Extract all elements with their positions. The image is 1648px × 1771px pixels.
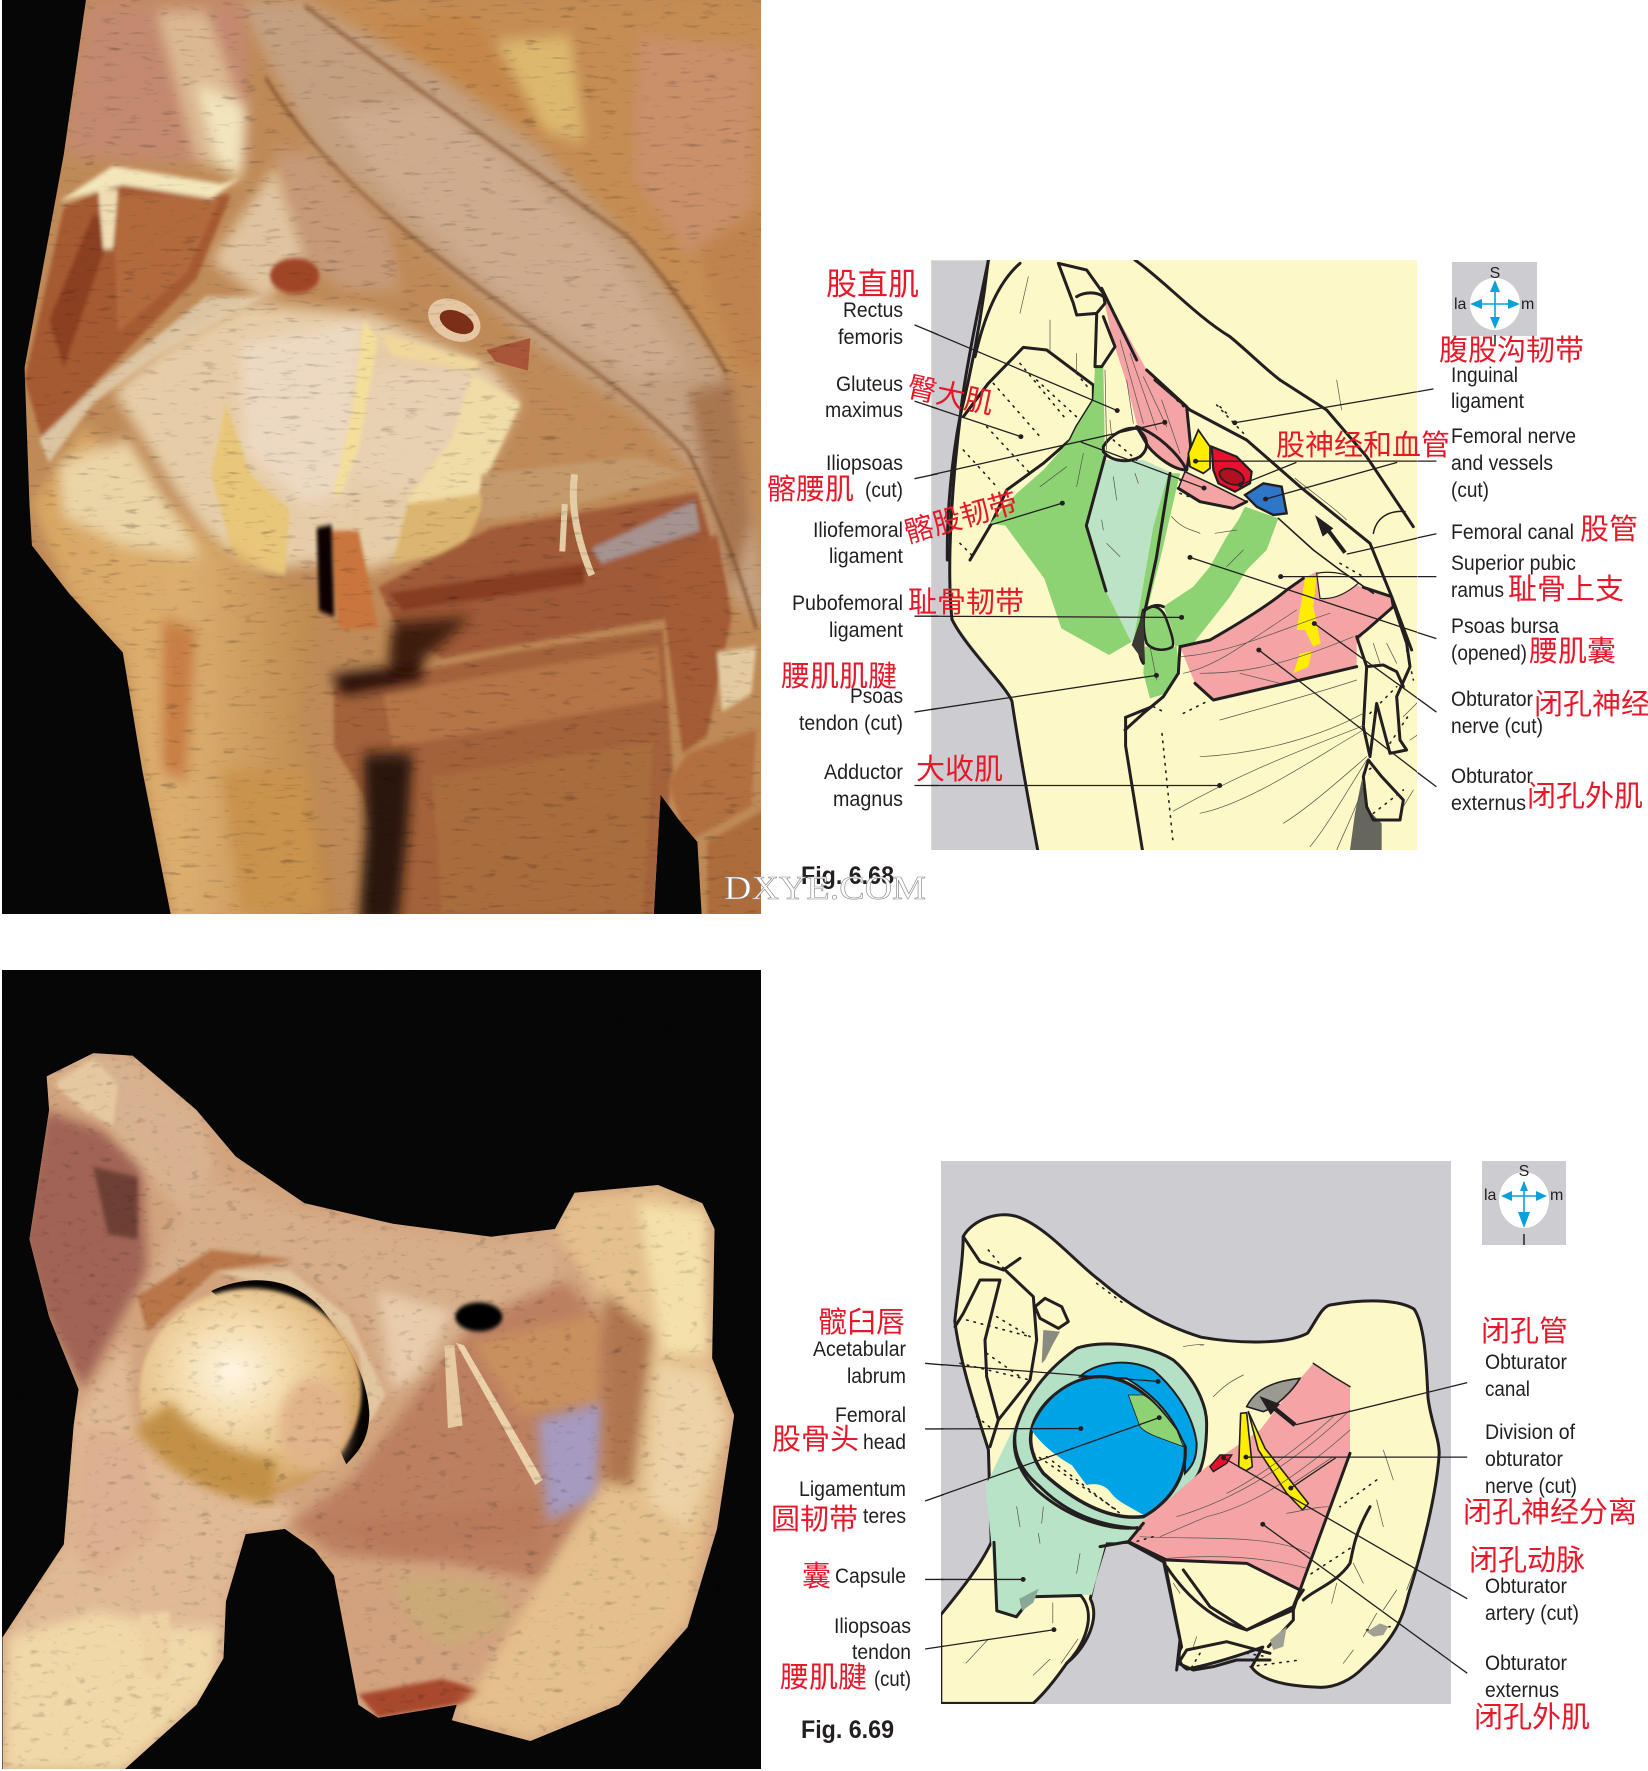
labels right, Fig. 6.68: Obturator (1451, 687, 1533, 711)
tissue: dark shadows between muscles (329, 617, 471, 925)
striations (1150, 380, 1353, 683)
tissue: nerve strand (562, 474, 592, 575)
stipple around socket (1033, 1453, 1153, 1543)
muscle: iliopsoas pink (1102, 288, 1190, 470)
tissue: dark cleft beside tendon (317, 525, 334, 617)
tissue: dark iliac recess (93, 1167, 138, 1239)
labels right, Fig. 6.68: (cut) (1451, 478, 1489, 502)
orientation compass, Fig. 6.68 (1452, 262, 1537, 350)
capsule: pale green lower (986, 1422, 1162, 1617)
red Chinese labels, Fig. 6.69: 股骨头 (772, 1424, 859, 1456)
tissue: joint capsule (113, 302, 521, 575)
labels right, Fig. 6.69: Obturator (1485, 1350, 1567, 1374)
outlines: lower contours (1125, 380, 1413, 730)
tissue: femoral artery cut end (428, 298, 530, 370)
labels left, Fig. 6.69: Capsule (835, 1564, 906, 1588)
tissue: abdominal fascia upper right (380, 12, 760, 369)
figure caption: Fig. 6.69: Fig. 6.69 (801, 1716, 894, 1744)
ilium contours traced at 3x (955, 1237, 1123, 1447)
artery lumen (1217, 465, 1246, 488)
lower right bones traced at 3x (1173, 1450, 1417, 1670)
labels left, Fig. 6.68: Adductor (824, 760, 903, 784)
tissue: head articular rim (152, 1379, 349, 1482)
labels right, Fig. 6.68: Psoas bursa (1451, 614, 1559, 638)
labels left, Fig. 6.69: tendon (852, 1640, 911, 1664)
leader line stubs outside the diagram, Fig. 6.68 (914, 325, 1436, 787)
bursa: small pink (1178, 472, 1247, 508)
tissue: psoas tendon block (140, 1611, 170, 1626)
tissue: red stump on the capsule (270, 258, 319, 294)
labels left, Fig. 6.69: head (863, 1430, 906, 1454)
tissue: adductor muscle (334, 629, 673, 925)
labels right, Fig. 6.69: Division of (1485, 1420, 1575, 1444)
leader line stubs outside the diagram, Fig. 6.69 (925, 1363, 1467, 1673)
pink contours (1015, 1433, 1350, 1670)
labels left, Fig. 6.68: Iliofemoral (813, 518, 903, 542)
stipple (1363, 650, 1413, 813)
labels right, Fig. 6.68: Femoral canal (1451, 520, 1574, 544)
orientation compass, Fig. 6.69 (1482, 1161, 1566, 1249)
labels right, Fig. 6.68: Obturator (1451, 764, 1533, 788)
ligament: iliofemoral green (990, 367, 1131, 655)
red Chinese labels, Fig. 6.69: 闭孔外肌 (1474, 1701, 1590, 1734)
tissue: nerve strands (444, 1343, 543, 1485)
artery: femoral red (1212, 447, 1252, 492)
tissue: obturator externus muscle (290, 1281, 614, 1581)
tissue: pelvis and femur base colour (2, 1053, 734, 1769)
labels left, Fig. 6.68: femoris (838, 325, 903, 349)
leader lines (914, 325, 1436, 787)
labels right, Fig. 6.68: Superior pubic (1451, 551, 1576, 575)
labels right, Fig. 6.69: canal (1485, 1377, 1530, 1401)
red Chinese labels, Fig. 6.68: 大收肌 (916, 753, 1003, 786)
labels left, Fig. 6.69: labrum (847, 1364, 906, 1388)
tissue: gluteal red muscle (25, 166, 265, 463)
labels left, Fig. 6.69: Acetabular (813, 1337, 906, 1361)
labels left, Fig. 6.68: Pubofemoral (792, 591, 903, 615)
orientation compass, Fig. 6.69: m (1550, 1187, 1563, 1204)
labels left, Fig. 6.68: Psoas (850, 684, 903, 708)
tissue: yellow bands on capsule (211, 320, 521, 575)
red Chinese labels, Fig. 6.69: 闭孔管 (1481, 1315, 1568, 1348)
labels left, Fig. 6.68: Rectus (843, 298, 903, 322)
red Chinese labels, Fig. 6.68 (767, 267, 1648, 813)
labels left, Fig. 6.68: Iliopsoas (826, 451, 903, 475)
labels left, Fig. 6.69: (cut) (874, 1667, 911, 1691)
photo: dissection of the anterior hip, Fig. 6.68 (0, 0, 780, 930)
nerve: division of obturator nerve yellow (1239, 1412, 1308, 1510)
red Chinese labels, Fig. 6.69: 髋臼唇 (818, 1306, 905, 1339)
central vessels traced at 3x (1125, 380, 1413, 730)
femoral head blue (1032, 1378, 1184, 1515)
labels right, Fig. 6.68 (1451, 363, 1576, 815)
tissue: femoral neck and capsule (2, 1338, 295, 1771)
orientation compass, Fig. 6.68: S (1490, 265, 1500, 282)
arrow: obturator canal (1259, 1396, 1295, 1425)
dark stipple below the notch (1042, 1330, 1060, 1363)
labels left, Fig. 6.68: ligament (829, 544, 903, 568)
tissue: black crescent around femoral head (211, 1280, 369, 1464)
labels left, Fig. 6.68: (cut) (865, 478, 903, 502)
red Chinese labels, Fig. 6.68: 股直肌 (826, 267, 919, 302)
lower right bones traced at 3x (1200, 603, 1420, 850)
red Chinese labels, Fig. 6.68: 腰肌囊 (1529, 635, 1616, 668)
stipple (1190, 1480, 1390, 1670)
tissue: fascia crease lines (265, 6, 756, 629)
labels left, Fig. 6.69: teres (863, 1504, 906, 1528)
labels right, Fig. 6.68: and vessels (1451, 451, 1553, 475)
red Chinese labels, Fig. 6.68: 髂腰肌 (767, 473, 854, 506)
labels right, Fig. 6.69 (1485, 1350, 1579, 1702)
stipple (1162, 734, 1173, 844)
red Chinese labels, Fig. 6.69: 圆韧带 (771, 1504, 858, 1536)
ligament: pale central band (1086, 460, 1173, 642)
watermark: DXYE.COM: DXYE.COM (724, 870, 926, 907)
bone: pelvis and femur cream shape (941, 1215, 1439, 1703)
red Chinese labels, Fig. 6.68: 腰肌肌腱 (781, 660, 897, 693)
leader dots (1018, 408, 1317, 788)
labels right, Fig. 6.69: Obturator (1485, 1651, 1567, 1675)
femur and lower thigh contours (914, 260, 1436, 850)
tissue: spine highlight (54, 1058, 118, 1126)
tissue: upper thigh muscle (64, 0, 250, 181)
labels left, Fig. 6.68: maximus (825, 398, 903, 422)
orientation compass, Fig. 6.69: la (1484, 1187, 1497, 1204)
labels right, Fig. 6.69: Obturator (1485, 1574, 1567, 1598)
tissue: reddish rim above the socket (138, 1250, 295, 1332)
upper diagram colours traced at 3x (947, 260, 1280, 655)
labels left, Fig. 6.69: Ligamentum (799, 1477, 906, 1501)
arrow: femoral canal (1315, 515, 1345, 553)
leader lines (925, 1363, 1467, 1673)
nerve: obturator nerve yellow (1293, 577, 1321, 673)
labels right, Fig. 6.69: externus (1485, 1678, 1559, 1702)
ligament: green strip (1133, 473, 1180, 643)
orientation compass, Fig. 6.69: I (1522, 1232, 1526, 1249)
thin curved bone line at the top right (1373, 511, 1405, 533)
labels left, Fig. 6.69 (799, 1337, 911, 1691)
fine lines (966, 1603, 1078, 1675)
tissue: pubic region right (457, 1188, 732, 1738)
tissue: iliopsoas fibres (211, 148, 400, 302)
labels right, Fig. 6.69: artery (cut) (1485, 1601, 1579, 1625)
labels left, Fig. 6.68 (792, 298, 903, 811)
tissue: medial muscle stump right (664, 532, 761, 914)
stipple (960, 1250, 1123, 1430)
stippled dark wedge (1350, 780, 1382, 850)
labels left, Fig. 6.68: ligament (829, 618, 903, 642)
red Chinese labels, Fig. 6.68: 耻骨上支 (1508, 573, 1624, 606)
ligament: pubofemoral green lower (1163, 507, 1278, 647)
muscle striations (1017, 1345, 1350, 1573)
tissue: ischial region (334, 1575, 454, 1718)
stipple lines (960, 363, 1230, 557)
stipple (1153, 405, 1363, 713)
orientation compass, Fig. 6.69: S (1519, 1163, 1529, 1180)
labels right, Fig. 6.69: nerve (cut) (1485, 1474, 1577, 1498)
labels left, Fig. 6.68: tendon (cut) (799, 711, 903, 735)
red Chinese labels, Fig. 6.68: 闭孔外肌 (1527, 780, 1643, 813)
red Chinese labels, Fig. 6.68: 腹股沟韧带 (1439, 334, 1584, 367)
orientation compass, Fig. 6.68: la (1454, 296, 1467, 313)
labels left, Fig. 6.68: magnus (833, 787, 903, 811)
capsule ring outer (1014, 1344, 1207, 1528)
red Chinese labels, Fig. 6.69: 闭孔动脉 (1469, 1544, 1585, 1577)
vein: blue (1245, 483, 1287, 515)
labels right, Fig. 6.68: nerve (cut) (1451, 714, 1543, 738)
red Chinese labels, Fig. 6.69: 闭孔神经分离 (1463, 1496, 1637, 1529)
acetabulum traced at 3x (1014, 1344, 1350, 1670)
capsule and lower femur details (925, 1363, 1467, 1675)
tissue: cut tendon stump (329, 531, 378, 629)
red Chinese labels, Fig. 6.68: 臀大肌 (905, 371, 997, 421)
tissue: iliac blade muscle (20, 1110, 147, 1389)
tissue: overall specimen (0, 0, 770, 930)
tissue: inguinal ligament band (236, 0, 770, 629)
tissue: obturator muscle band (378, 457, 727, 658)
femur fine lines (1173, 726, 1364, 811)
tissue: bluish aponeurosis patch (538, 1402, 604, 1521)
labels left, Fig. 6.69: Iliopsoas (834, 1614, 911, 1638)
tissue: femur shaft and trochanter (32, 427, 339, 925)
panel: line diagram Fig. 6.68 (914, 260, 1436, 850)
pelvic fine fibres (1200, 643, 1420, 850)
tissue: anterior inferior spine rim (49, 1056, 565, 1394)
dark stipple next to tendon (1132, 610, 1145, 663)
tissue: obturator canal hole (455, 1302, 502, 1331)
red Chinese labels, Fig. 6.68: 耻骨韧带 (908, 586, 1024, 619)
red Chinese labels, Fig. 6.69 (771, 1306, 1637, 1734)
muscle: obturator externus pink (1180, 572, 1393, 700)
labels right, Fig. 6.68: externus (1451, 791, 1526, 815)
cartilage crescent blue (1080, 1363, 1197, 1473)
orientation compass, Fig. 6.68: I (1493, 333, 1497, 350)
tissue: femoral head (139, 1288, 361, 1495)
labels right, Fig. 6.68: ramus (1451, 578, 1504, 602)
labels right, Fig. 6.68: Inguinal (1451, 363, 1518, 387)
orientation compass, Fig. 6.68: m (1521, 296, 1534, 313)
tissue: red bottom edge (359, 1679, 496, 1718)
panel: line diagram Fig. 6.69 (925, 1161, 1467, 1704)
labels right, Fig. 6.68: ligament (1451, 389, 1524, 413)
artery: obturator artery red (1210, 1455, 1232, 1472)
gluteus fold (963, 347, 1093, 560)
red Chinese labels, Fig. 6.69: 腰肌腱 (780, 1661, 867, 1694)
grey background strip (931, 260, 1038, 850)
red Chinese labels, Fig. 6.68: 股神经和血管 (1276, 429, 1450, 462)
red Chinese labels, Fig. 6.68: 髂股韧带 (901, 486, 1021, 550)
contours (1357, 603, 1410, 820)
striations (1020, 277, 1180, 557)
socket cream (1031, 1377, 1185, 1517)
labels left, Fig. 6.69: Femoral (835, 1403, 906, 1427)
labels right, Fig. 6.69: obturator (1485, 1447, 1563, 1471)
obturator canal (1247, 1378, 1300, 1412)
leader dots (1021, 1379, 1293, 1632)
outlines: top bone and central (947, 260, 1280, 642)
figure caption: Fig. 6.68: Fig. 6.68 (801, 862, 894, 890)
nerve: femoral nerve yellow (1188, 430, 1210, 473)
stipple on capsule (1019, 1589, 1039, 1611)
pink upper edge, thin (1313, 1363, 1350, 1387)
tissue: iliac rim pale band (216, 1270, 386, 1425)
cream notch in the muscle (1317, 572, 1358, 599)
red Chinese labels, Fig. 6.69: 囊 (802, 1560, 831, 1593)
fine lines (1173, 1450, 1417, 1663)
muscle: obturator externus pink (1128, 1363, 1350, 1590)
red Chinese labels, Fig. 6.68: 闭孔神经 (1534, 688, 1648, 721)
labels right, Fig. 6.68: Femoral nerve (1451, 424, 1576, 448)
labels right, Fig. 6.68: (opened) (1451, 641, 1527, 665)
red Chinese labels, Fig. 6.68: 股管 (1580, 513, 1638, 546)
tendon: psoas tendon ring and lower part (1143, 607, 1180, 698)
ligamentum teres green (1128, 1395, 1183, 1447)
photo: dissected hip with femoral head, Fig. 6.69 (0, 960, 780, 1771)
labels left, Fig. 6.68: Gluteus (836, 372, 903, 396)
stipple patches (1270, 1623, 1388, 1650)
